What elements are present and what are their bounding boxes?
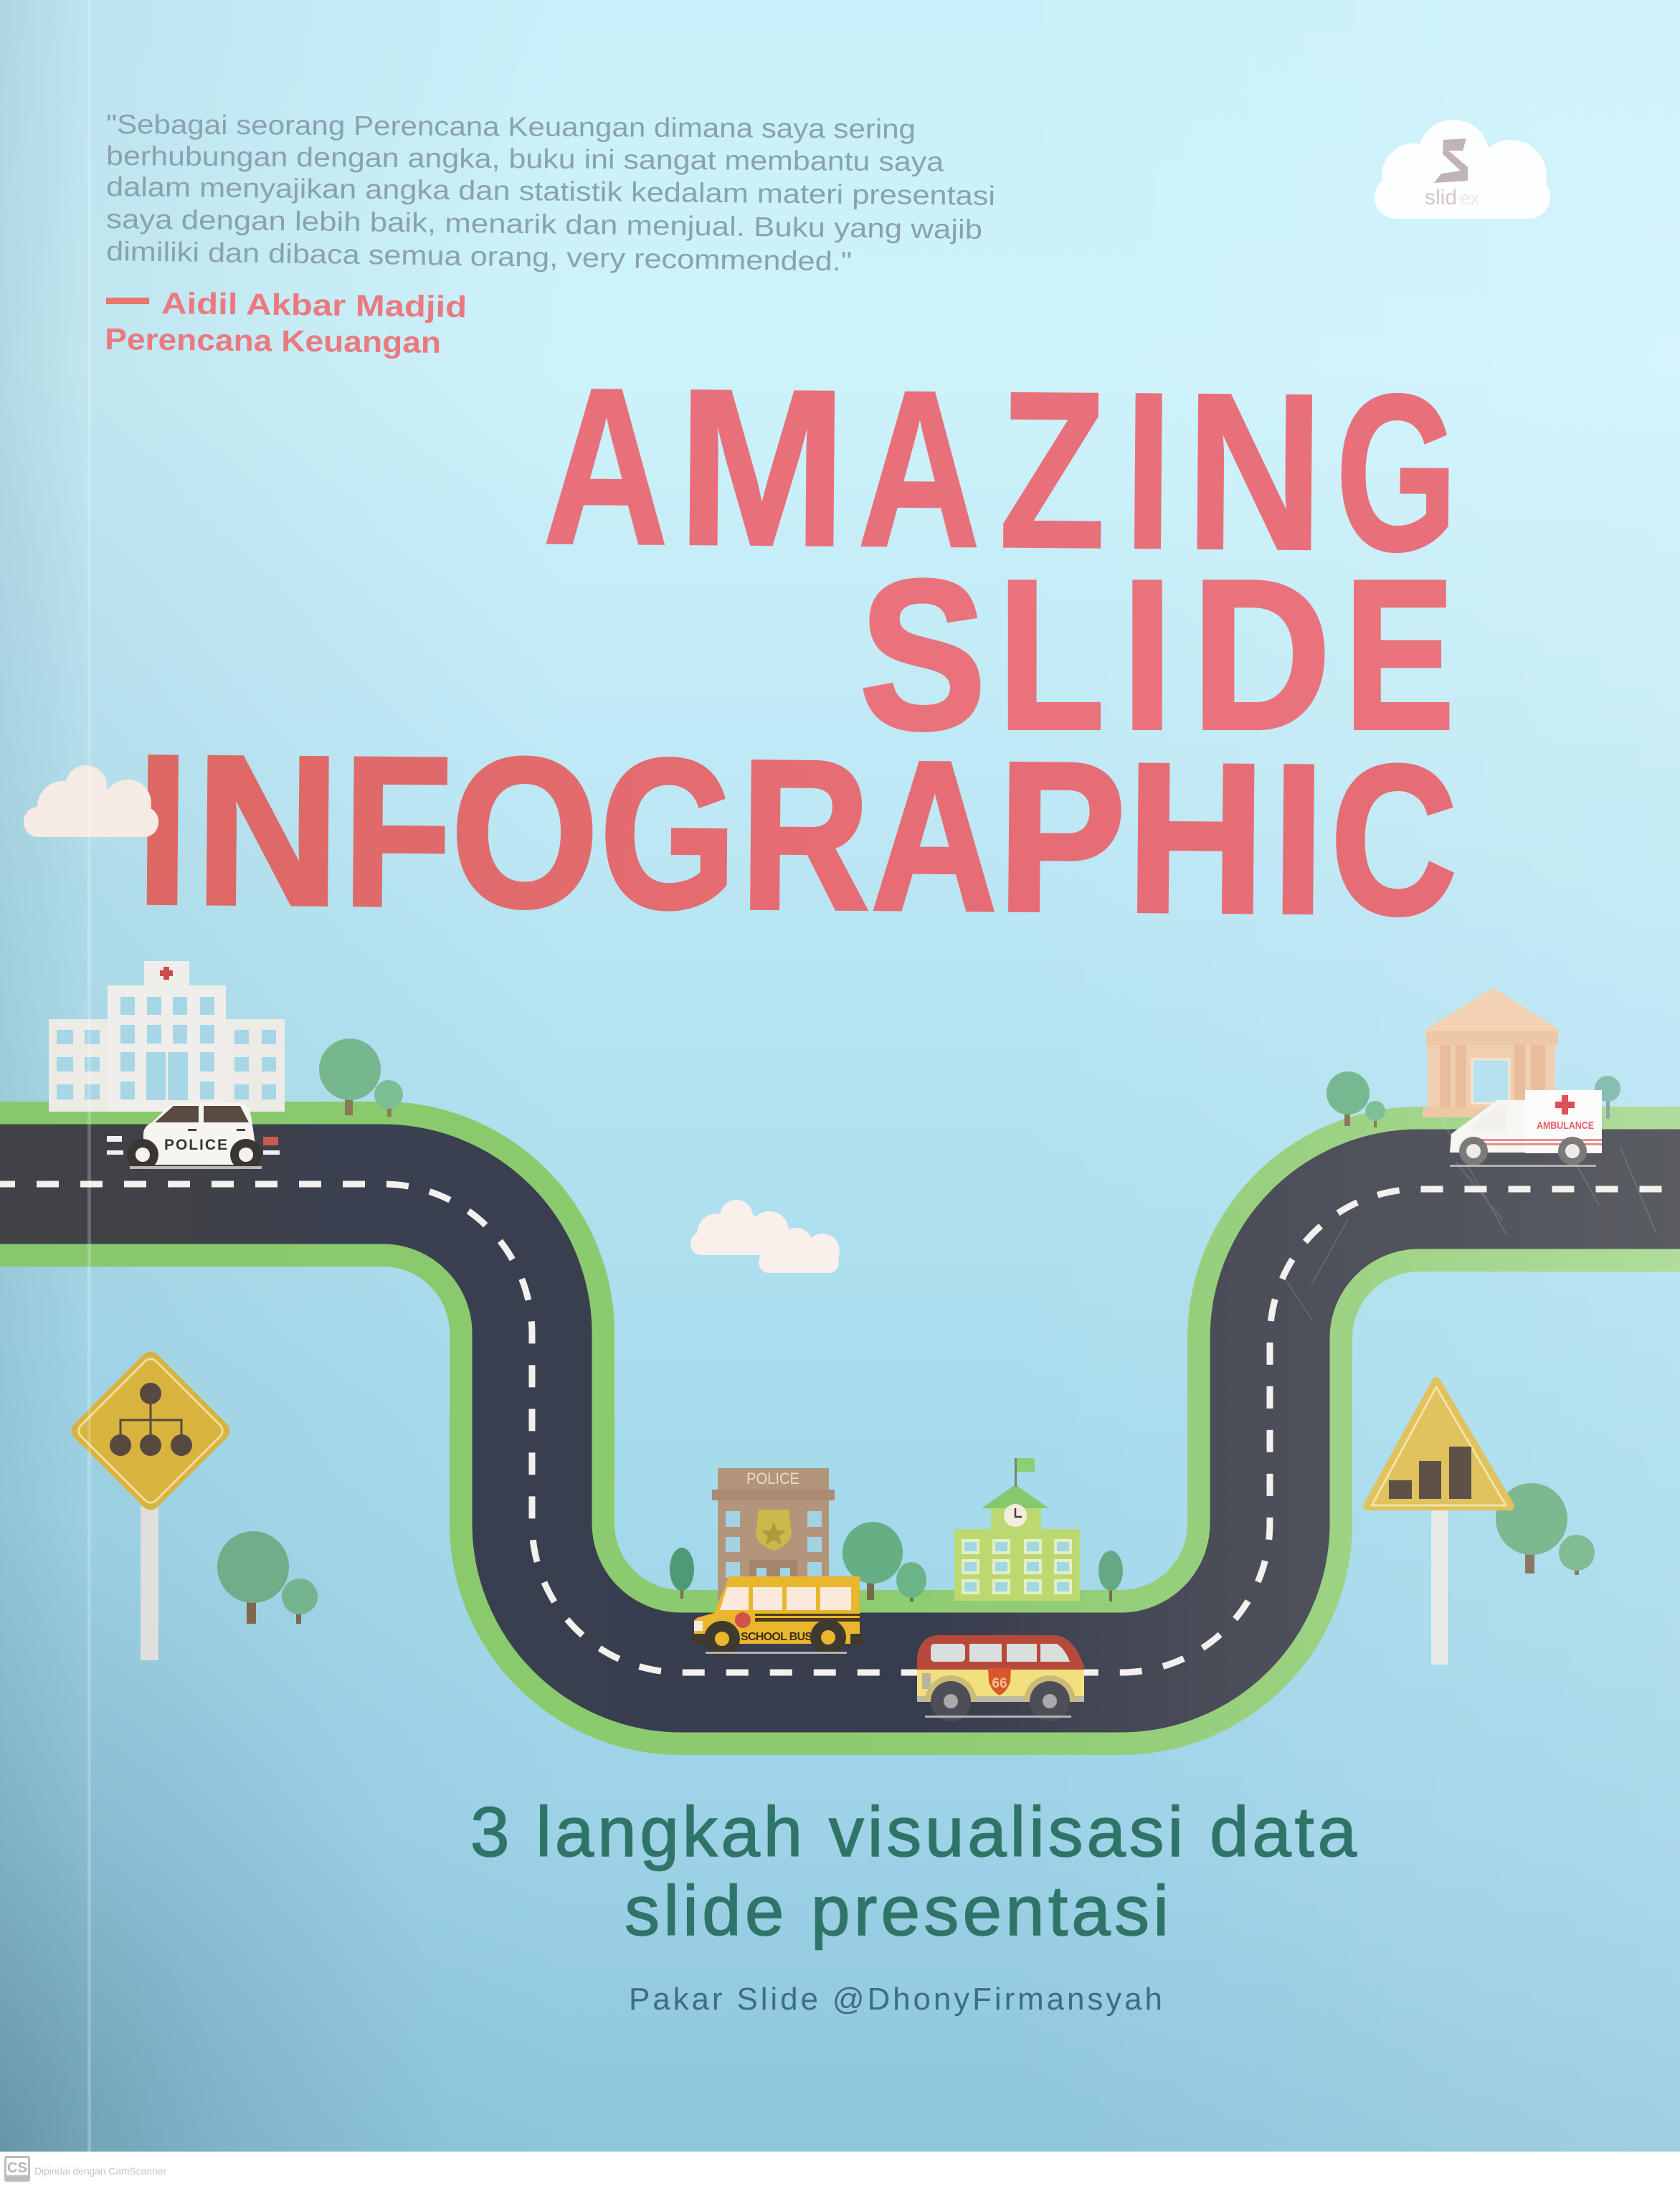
title: N	[194, 711, 341, 950]
red cross	[160, 967, 173, 980]
title: I	[1123, 346, 1173, 595]
title: C	[1329, 720, 1458, 959]
CamScanner logo: CS	[7, 2160, 27, 2176]
publisher logo cloud	[1375, 120, 1550, 219]
title: R	[739, 716, 870, 954]
subtitle: 3 langkah visualisasi data	[470, 1792, 1357, 1871]
bank building	[1423, 988, 1560, 1117]
title: L	[998, 536, 1104, 773]
title: A	[870, 716, 998, 955]
police car: POLICE	[164, 1137, 227, 1153]
far right tree	[1595, 1076, 1620, 1119]
title: G	[599, 714, 737, 953]
testimonial quote: berhubungan dengan angka, buku ini sangat membantu saya	[106, 141, 944, 178]
title: Z	[998, 344, 1106, 595]
title: E	[1344, 536, 1454, 773]
title: P	[997, 718, 1126, 956]
title: A	[857, 344, 982, 594]
school bus	[691, 1576, 863, 1657]
police badge	[756, 1510, 792, 1551]
subtitle: slide presentasi	[625, 1871, 1169, 1950]
publisher logo cloud: slid	[1425, 186, 1457, 209]
publisher logo cloud: ex	[1460, 187, 1479, 209]
title: G	[1334, 347, 1458, 597]
trees around police station	[670, 1522, 926, 1601]
hospital	[49, 961, 285, 1112]
testimonial quote: saya dengan lebih baik, menarik dan menjual. Buku yang wajib	[106, 204, 982, 245]
van route 66: 66	[992, 1676, 1007, 1691]
trees lower left	[217, 1531, 318, 1624]
road sign: bar chart	[1367, 1381, 1510, 1665]
trees by hospital	[319, 1038, 403, 1117]
school clock	[1004, 1504, 1027, 1527]
scanner footer: Dipindai dengan CamScanner	[34, 2165, 166, 2177]
scanner footer	[0, 2152, 1680, 2186]
trees upper right	[1327, 1071, 1385, 1127]
trees lower right	[1496, 1483, 1595, 1575]
testimonial quote: "Sebagai seorang Perencana Keuangan dimana saya sering	[106, 110, 916, 145]
title: I	[136, 711, 189, 948]
police car	[107, 1103, 280, 1170]
title: F	[342, 712, 452, 950]
tree right of school	[1098, 1551, 1123, 1601]
cloud: middle	[690, 1200, 840, 1273]
van route 66	[917, 1635, 1084, 1721]
police station: POLICE	[746, 1470, 799, 1487]
title: A	[542, 341, 670, 591]
title: I	[1271, 720, 1325, 957]
subtitle	[470, 1792, 1357, 1950]
testimonial quote: dimiliki dan dibaca semua orang, very recommended."	[106, 237, 852, 278]
quote attribution: Perencana Keuangan	[105, 322, 441, 359]
spine fold	[87, 0, 91, 2152]
title: M	[676, 342, 848, 592]
quote attribution: Aidil Akbar Madjid	[161, 286, 467, 323]
title: H	[1126, 719, 1266, 957]
road scratches	[1283, 1119, 1656, 1320]
cloud: left	[24, 765, 158, 837]
school bus: SCHOOL BUS	[741, 1631, 812, 1643]
route 66 shield	[988, 1668, 1011, 1695]
school building	[954, 1458, 1080, 1601]
ambulance	[1450, 1090, 1602, 1167]
ambulance: AMBULANCE	[1537, 1120, 1594, 1132]
police station	[712, 1468, 835, 1604]
title: N	[1185, 346, 1324, 597]
title: I	[1122, 536, 1172, 773]
CamScanner logo	[4, 2156, 30, 2182]
quote attribution	[105, 286, 467, 359]
road with grass verge	[0, 1184, 1680, 1672]
title: O	[450, 713, 599, 952]
road sign: hierarchy diagram	[67, 1348, 234, 1660]
title: S	[860, 536, 986, 773]
testimonial quote	[106, 110, 995, 278]
author line: Pakar Slide @DhonyFirmansyah	[629, 1982, 1162, 2017]
title: D	[1192, 536, 1331, 773]
title	[136, 341, 1458, 959]
testimonial quote: dalam menyajikan angka dan statistik kedalam materi presentasi	[106, 172, 995, 212]
